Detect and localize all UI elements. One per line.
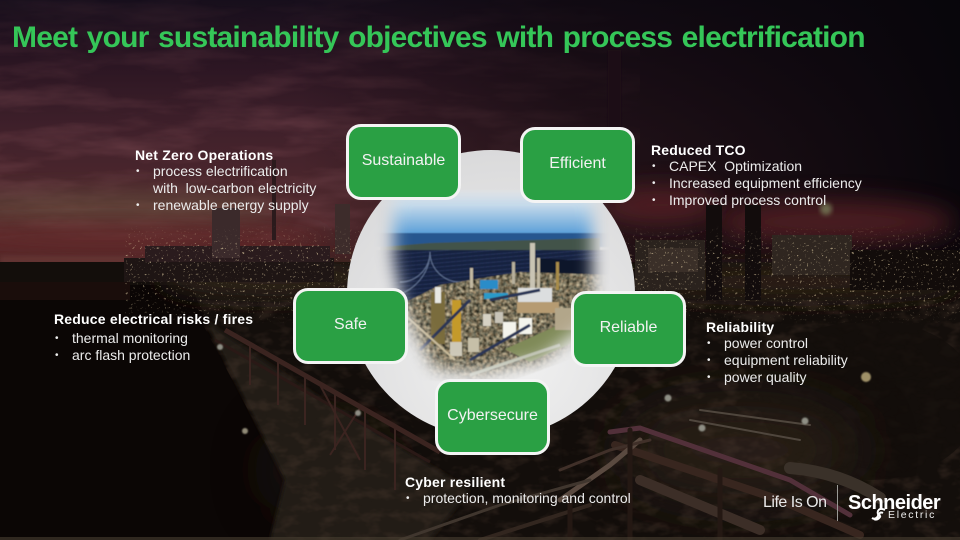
brand sub: Electric [888,509,936,521]
card: Efficient: Efficient [549,155,606,172]
text: Reliability: equipment reliability [724,352,848,368]
central circle with plant photo [347,150,635,427]
horizon sparkle lights [125,226,960,323]
text: Reduce electrical risks: arc flash protection [72,347,190,363]
text: Reduce electrical risks: Reduce electrical risks / fires [54,311,253,327]
card: Cybersecure: Cybersecure [447,407,538,424]
road surface [205,320,470,540]
text: Reliability: Reliability [706,319,774,335]
text: Net Zero Operations: Net Zero Operations [135,147,273,163]
tagline: Life Is On [763,494,826,511]
card: Sustainable [346,124,461,200]
pipe rack [215,330,440,490]
text: Cyber resilient [405,474,631,506]
card: Reliable: Reliable [600,319,657,336]
brand name: Schneider [848,492,940,514]
ground [0,262,960,540]
text: Reliability: power quality [724,369,806,385]
logo: Life Is On Schneider Electric [763,485,940,521]
card: Efficient [520,127,635,203]
text: Reduced TCO: Increased equipment efficiency [669,175,862,191]
text: Reliability [706,319,848,385]
plant details [405,243,580,375]
text: Net Zero Operations [135,147,316,213]
text: Reduced TCO: CAPEX Optimization [669,158,802,174]
text: Cyber resilient: protection, monitoring and control [423,490,631,506]
text: Net Zero Operations: process electrification [153,163,288,179]
text: Reduced TCO: Reduced TCO [651,142,746,158]
text: Reduced TCO [651,142,862,208]
card: Reliable [571,291,686,367]
card: Sustainable: Sustainable [362,152,445,169]
text: Net Zero Operations: with low-carbon electricity [153,180,316,196]
text: Cyber resilient: Cyber resilient [405,474,505,490]
card: Cybersecure [435,379,550,455]
silhouettes [124,50,960,300]
text: Reduce electrical risks [54,311,253,363]
pipes bottom right [400,410,880,540]
card: Safe: Safe [334,316,367,333]
title: Meet your sustainability objectives with process electrification [12,21,865,54]
text: Reduce electrical risks: thermal monitoring [72,330,188,346]
icon: Schneider S mark [872,508,886,521]
divider [837,485,838,521]
text: Net Zero Operations: renewable energy supply [153,197,309,213]
text: Reduced TCO: Improved process control [669,192,826,208]
card: Safe [293,288,408,364]
text: Reliability: power control [724,335,808,351]
